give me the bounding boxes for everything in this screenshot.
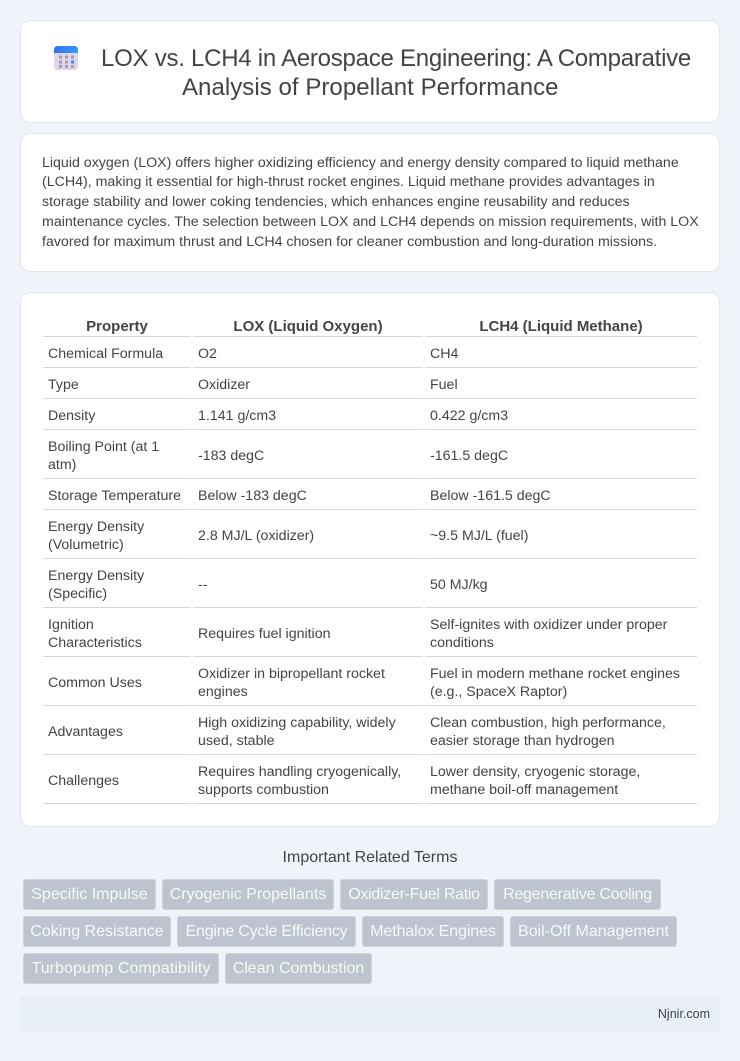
panel: introduction xyxy=(20,133,720,272)
value: methane boil-off management xyxy=(430,782,618,798)
value xyxy=(425,400,697,430)
tag: Turbopump Compatibility xyxy=(31,960,211,977)
row: Energy Density Volumetric: (Volumetric) xyxy=(48,536,124,552)
value xyxy=(425,560,697,608)
row: Boiling Point: atm) xyxy=(48,456,76,472)
row: Ignition Characteristics: Ignition xyxy=(48,616,94,632)
tag: Specific Impulse xyxy=(31,886,148,903)
value: 1.141 g/cm3 xyxy=(198,408,276,424)
text block: introduction: Liquid oxygen (LOX) offers higher oxidizing efficiency and energy density compared to liquid methane xyxy=(42,154,679,170)
tag xyxy=(340,879,488,910)
tag: Regenerative Cooling xyxy=(503,886,652,903)
value: -- xyxy=(198,576,207,592)
tag: Oxidizer-Fuel Ratio xyxy=(348,886,480,903)
value: High oxidizing capability, widely xyxy=(198,714,396,730)
row: Type: Type xyxy=(48,376,79,392)
tag: Cryogenic Propellants xyxy=(170,886,326,903)
value xyxy=(425,480,697,510)
row: Energy Density Volumetric: Energy Density xyxy=(48,518,144,534)
tag xyxy=(362,916,504,947)
table header: LCH4: LCH4 (Liquid Methane) xyxy=(479,318,643,335)
value: Requires fuel ignition xyxy=(198,626,330,642)
value: used, stable xyxy=(198,732,275,748)
value: 2.8 MJ/L (oxidizer) xyxy=(198,528,314,544)
value xyxy=(193,400,423,430)
value xyxy=(425,707,697,755)
row: Advantages xyxy=(43,707,191,755)
tag xyxy=(177,916,356,947)
tag xyxy=(494,879,661,910)
row: Boiling Point: Boiling Point (at 1 xyxy=(48,438,159,454)
title: LOX vs. LCH4 in Aerospace Engineering: A Comparative xyxy=(101,45,691,72)
value xyxy=(425,511,697,559)
value xyxy=(425,338,697,368)
value: Lower density, cryogenic storage, xyxy=(430,764,640,780)
value xyxy=(193,658,423,706)
table header: LOX: LOX (Liquid Oxygen) xyxy=(233,318,383,335)
value: CH4 xyxy=(430,346,458,362)
row: Challenges xyxy=(43,756,191,804)
value xyxy=(193,431,423,479)
value: Oxidizer in bipropellant rocket xyxy=(198,666,385,682)
value: -161.5 degC xyxy=(430,448,508,464)
value xyxy=(193,560,423,608)
value xyxy=(193,338,423,368)
row: Energy Density Specific xyxy=(43,560,191,608)
row: Energy Density Specific: (Specific) xyxy=(48,586,107,602)
panel: comparison table xyxy=(20,292,720,827)
row: Energy Density Specific: Energy Density xyxy=(48,568,144,584)
row: Ignition Characteristics: Characteristics xyxy=(48,634,142,650)
title xyxy=(101,45,691,101)
row: Storage Temperature xyxy=(43,480,191,510)
value xyxy=(425,431,697,479)
row: Density: Density xyxy=(48,408,95,424)
tag xyxy=(225,953,372,984)
value xyxy=(193,511,423,559)
tag: Coking Resistance xyxy=(30,923,164,940)
value: 50 MJ/kg xyxy=(430,576,488,592)
tag xyxy=(23,953,219,984)
table header: Property: Property xyxy=(86,318,148,335)
value: O2 xyxy=(198,346,217,362)
row: Advantages: Advantages xyxy=(48,724,123,740)
table header: LOX xyxy=(193,314,423,337)
tag: Methalox Engines xyxy=(370,923,496,940)
value: Below -161.5 degC xyxy=(430,488,551,504)
text block: introduction xyxy=(42,154,699,250)
tag: Engine Cycle Efficiency xyxy=(186,923,347,940)
value xyxy=(193,756,423,804)
footer xyxy=(20,997,720,1031)
row: Chemical Formula: Chemical Formula xyxy=(48,346,163,362)
value: Clean combustion, high performance, xyxy=(430,714,666,730)
heading: related terms: Important Related Terms xyxy=(283,849,457,866)
text block: introduction: favored for maximum thrust and LCH4 chosen for cleaner combustion and long-duration missions. xyxy=(42,234,657,250)
value: engines xyxy=(198,684,248,700)
icon: calendar xyxy=(54,46,78,70)
value xyxy=(193,707,423,755)
row: Common Uses: Common Uses xyxy=(48,674,142,690)
value: Below -183 degC xyxy=(198,488,307,504)
value: Fuel xyxy=(430,376,458,392)
value xyxy=(193,609,423,657)
row: Energy Density Volumetric xyxy=(43,511,191,559)
row: Density xyxy=(43,400,191,430)
value xyxy=(425,609,697,657)
value: -183 degC xyxy=(198,448,264,464)
tag: Boil-Off Management xyxy=(518,923,669,940)
row: Challenges: Challenges xyxy=(48,772,119,788)
value xyxy=(425,756,697,804)
value: (e.g., SpaceX Raptor) xyxy=(430,684,567,700)
text block: introduction: maintenance cycles. The selection between LOX and LCH4 depends on mission requirements, with LOX xyxy=(42,214,699,230)
value: Requires handling cryogenically, xyxy=(198,764,401,780)
value: conditions xyxy=(430,634,494,650)
tag xyxy=(23,879,156,910)
value xyxy=(425,369,697,399)
row: Type xyxy=(43,369,191,399)
tag xyxy=(162,879,334,910)
tag: Clean Combustion xyxy=(233,960,364,977)
table header: Property xyxy=(43,314,191,337)
text block: introduction: storage stability and lower coking tendencies, which enhances engine reusability and reduces xyxy=(42,194,630,210)
value: Fuel in modern methane rocket engines xyxy=(430,666,680,682)
value: easier storage than hydrogen xyxy=(430,732,615,748)
tag xyxy=(23,916,171,947)
row: Chemical Formula xyxy=(43,338,191,368)
value: Oxidizer xyxy=(198,376,250,392)
value: ~9.5 MJ/L (fuel) xyxy=(430,528,528,544)
value: 0.422 g/cm3 xyxy=(430,408,508,424)
table header: LCH4 xyxy=(425,314,697,337)
row: Storage Temperature: Storage Temperature xyxy=(48,488,181,504)
value: supports combustion xyxy=(198,782,329,798)
row: Ignition Characteristics xyxy=(43,609,191,657)
value xyxy=(193,480,423,510)
text block: introduction: (LCH4), making it essential for high-thrust rocket engines. Liquid methane provides advantages in xyxy=(42,174,655,190)
footer: Njnir.com xyxy=(658,1007,710,1021)
title: Analysis of Propellant Performance xyxy=(182,74,559,101)
value xyxy=(425,658,697,706)
panel: header xyxy=(20,20,720,123)
tag xyxy=(510,916,677,947)
row: Boiling Point xyxy=(43,431,191,479)
value: Self-ignites with oxidizer under proper xyxy=(430,616,667,632)
value xyxy=(193,369,423,399)
row: Common Uses xyxy=(43,658,191,706)
